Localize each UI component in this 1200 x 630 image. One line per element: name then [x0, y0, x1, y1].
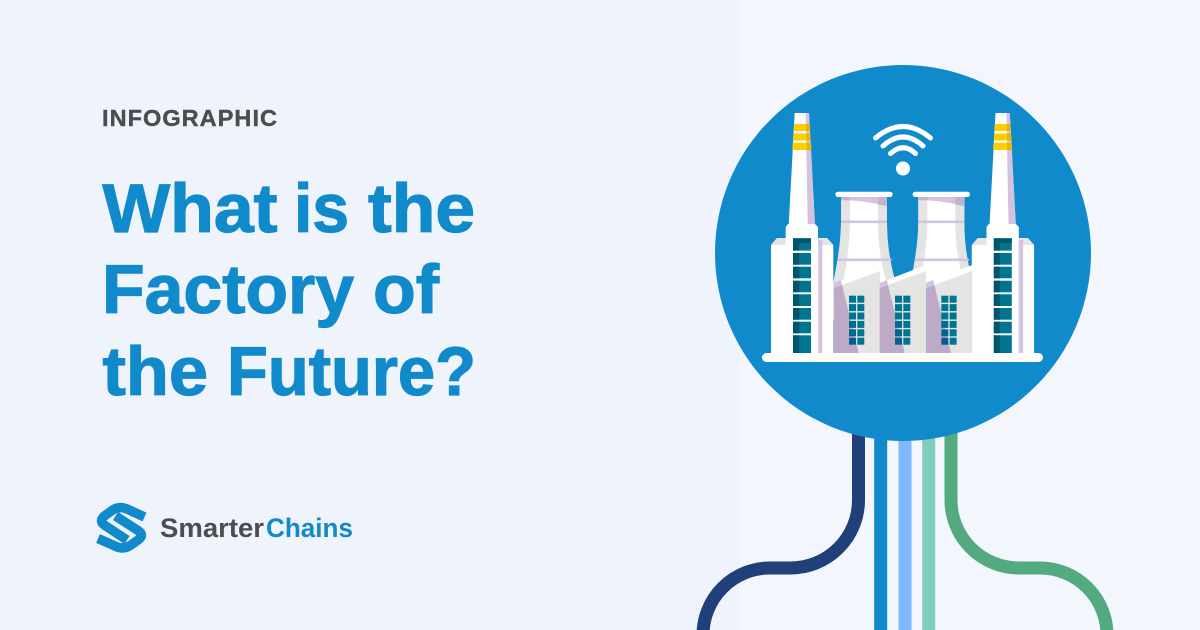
logo: SmarterChains	[98, 508, 353, 548]
data pipes	[703, 430, 1107, 630]
pipe: light blue	[898, 430, 912, 630]
pipe: blue	[874, 430, 887, 630]
shed left	[834, 265, 880, 353]
logo wordmark: Chains	[266, 513, 353, 543]
pipe: navy	[703, 430, 858, 630]
title: Factory	[102, 251, 354, 328]
base platform	[762, 353, 1043, 362]
factory illustration	[762, 113, 1043, 362]
cooling tower right	[910, 192, 973, 320]
logo wordmark: Smarter	[160, 513, 264, 543]
cooling tower left	[833, 192, 896, 320]
chimney building left	[771, 113, 833, 353]
blue circle	[715, 65, 1091, 441]
chimney building right	[972, 113, 1034, 353]
title: What	[102, 170, 278, 247]
shed right	[926, 265, 972, 353]
logo wordmark	[160, 513, 353, 543]
title: is	[294, 170, 349, 247]
eyebrow label: INFOGRAPHIC	[102, 105, 277, 131]
title	[102, 170, 476, 410]
shed middle	[880, 265, 926, 353]
pipe: green	[951, 430, 1107, 630]
icon: wifi	[876, 126, 930, 176]
title: the	[102, 333, 208, 410]
title: the	[368, 170, 475, 247]
title: Future?	[227, 333, 476, 410]
title: of	[373, 251, 439, 328]
pipe: teal	[922, 430, 935, 630]
icon: S mark	[98, 508, 144, 548]
